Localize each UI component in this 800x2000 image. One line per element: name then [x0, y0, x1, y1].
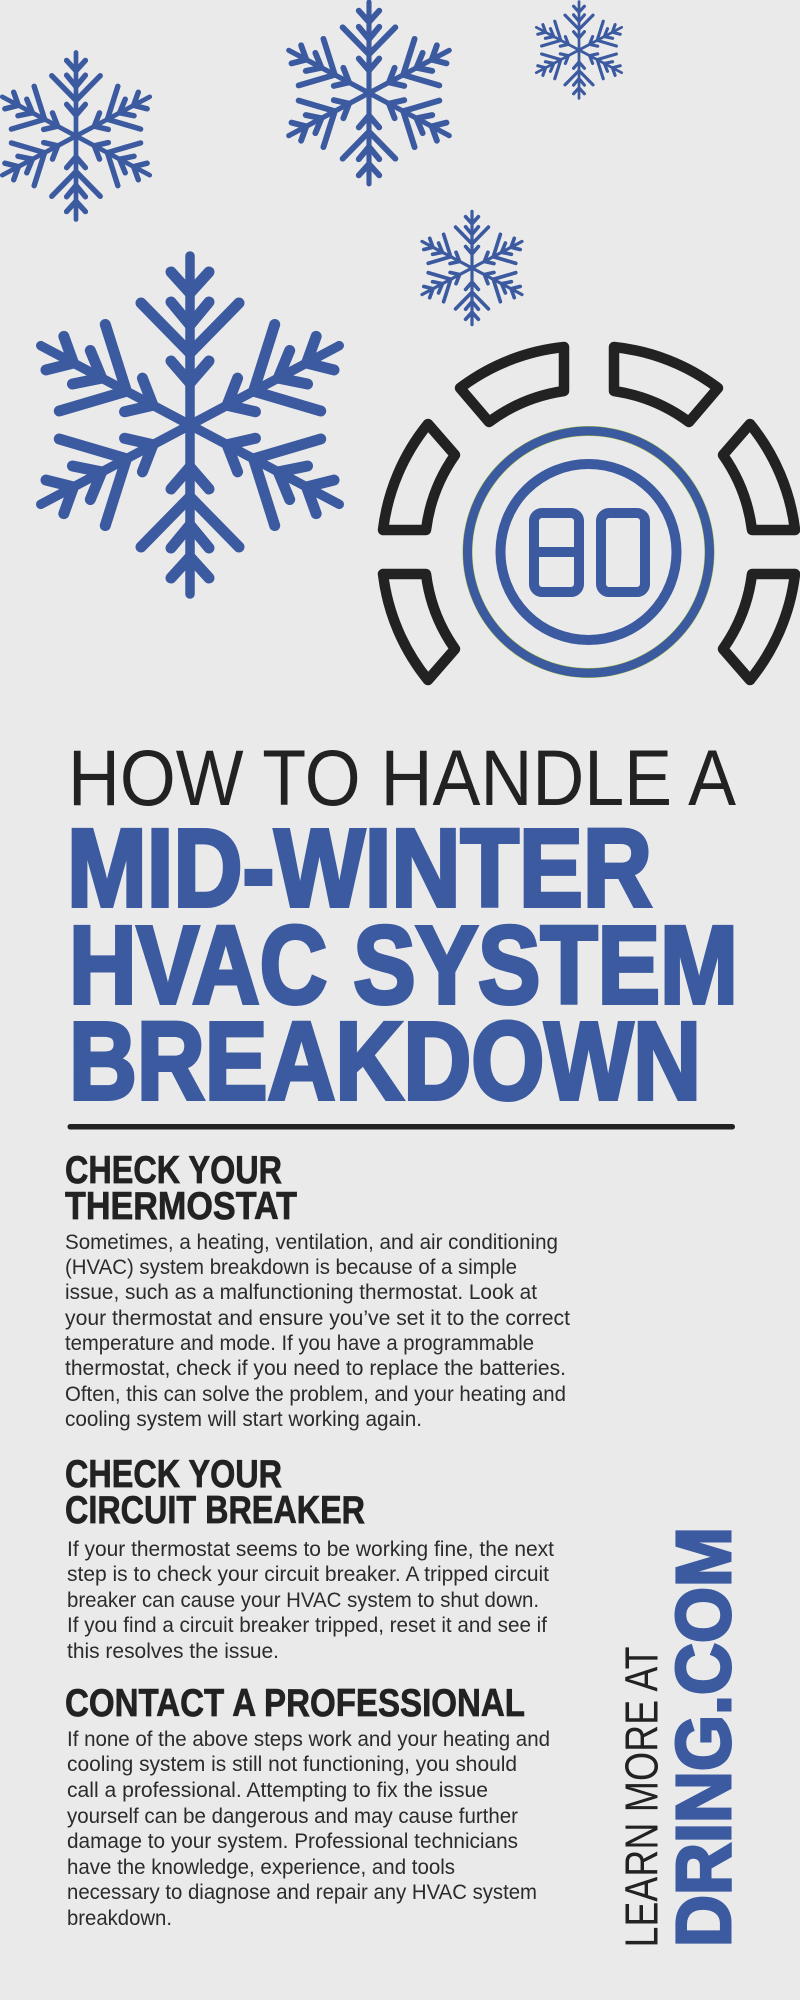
title line 4: BREAKDOWN	[69, 1000, 701, 1123]
body text: this resolves the issue.	[67, 1639, 279, 1663]
body text: thermostat, check if you need to replace the batteries.	[65, 1356, 566, 1380]
body text: step is to check your circuit breaker. A tripped circuit	[67, 1562, 549, 1586]
body text: breaker can cause your HVAC system to shut down.	[67, 1588, 539, 1612]
body text: If you find a circuit breaker tripped, reset it and see if	[67, 1613, 547, 1637]
vertical brand: dring.com: DRING.COM	[661, 1527, 747, 1947]
body text	[67, 1537, 554, 1663]
heading line 2: THERMOSTAT	[65, 1185, 297, 1228]
body text: If none of the above steps work and your heating and	[67, 1727, 550, 1751]
body text: If your thermostat seems to be working fine, the next	[67, 1537, 554, 1561]
vertical call to action: learn more at: LEARN MORE AT	[616, 1646, 668, 1948]
body text: necessary to diagnose and repair any HVAC system	[67, 1880, 537, 1904]
body text: issue, such as a malfunctioning thermostat. Look at	[65, 1280, 537, 1304]
section: contact a professional	[65, 1682, 550, 1930]
icon: snowflake top center	[276, 2, 462, 184]
heading: CHECK YOUR	[65, 1453, 282, 1496]
body text: damage to your system. Professional technicians	[67, 1829, 518, 1853]
body text	[67, 1727, 550, 1930]
title	[67, 733, 738, 1123]
icon: large snowflake	[18, 256, 362, 594]
body text: yourself can be dangerous and may cause further	[67, 1804, 518, 1828]
icon: snowflake top right	[530, 2, 628, 98]
heading line 2: CIRCUIT BREAKER	[65, 1489, 365, 1532]
heading: CHECK YOUR	[65, 1149, 282, 1192]
title line 2: MID-WINTER	[67, 807, 652, 930]
body text: your thermostat and ensure you’ve set it to the correct	[65, 1306, 570, 1330]
body text: Sometimes, a heating, ventilation, and air conditioning	[65, 1230, 558, 1254]
body text: cooling system is still not functioning, you should	[67, 1752, 517, 1776]
icon: snowflake small center	[414, 211, 530, 325]
section: check your thermostat	[65, 1149, 570, 1431]
icon: thermostat dial	[383, 347, 795, 680]
body text: (HVAC) system breakdown is because of a simple	[65, 1255, 517, 1279]
heading: CONTACT A PROFESSIONAL	[65, 1682, 525, 1725]
body text: breakdown.	[67, 1906, 172, 1930]
thermostat outer segments	[383, 347, 795, 680]
body text: temperature and mode. If you have a programmable	[65, 1331, 534, 1355]
body text	[65, 1230, 570, 1431]
thermostat reading 80	[534, 513, 645, 592]
body text: cooling system will start working again.	[65, 1407, 422, 1431]
body text: call a professional. Attempting to fix the issue	[67, 1778, 488, 1802]
body text: Often, this can solve the problem, and your heating and	[65, 1382, 566, 1406]
body text: have the knowledge, experience, and tools	[67, 1855, 455, 1879]
icon: snowflake top left	[0, 53, 161, 219]
section: check your circuit breaker	[65, 1453, 554, 1663]
title line 1: HOW TO HANDLE A	[68, 733, 736, 822]
thermostat rings	[463, 426, 714, 678]
